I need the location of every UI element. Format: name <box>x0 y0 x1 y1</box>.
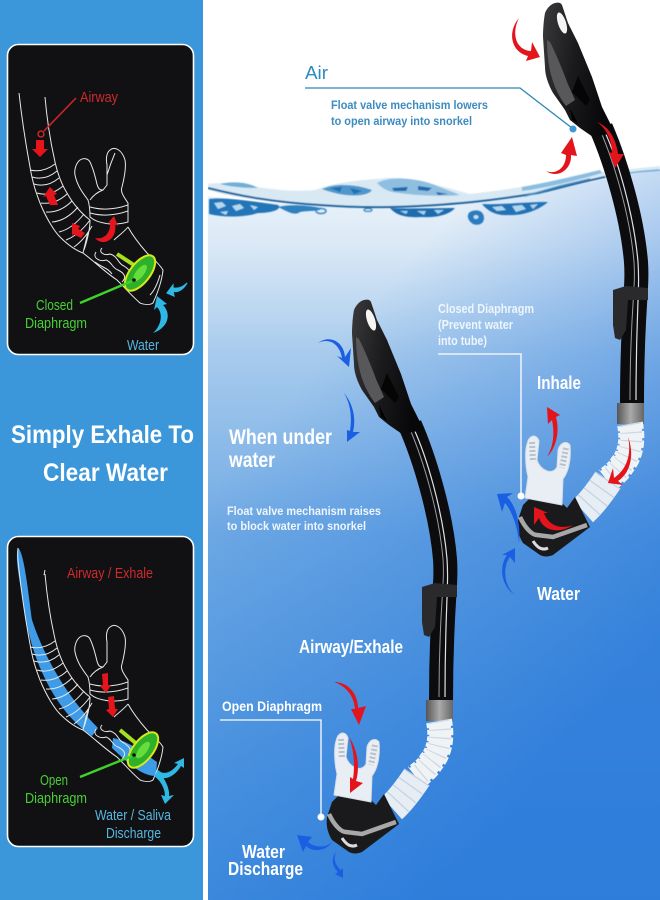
discharge arrows <box>154 758 184 804</box>
callout: open diaphragm <box>220 698 324 820</box>
snorkel: under water <box>327 300 457 854</box>
connector ring <box>617 403 644 424</box>
tube <box>601 128 636 404</box>
callout: closed diaphragm: (Prevent water <box>438 317 513 332</box>
panel: open diaphragm <box>8 536 194 846</box>
black elbow <box>327 794 399 854</box>
heading: when under water: When under <box>229 426 332 449</box>
red airflow arrows <box>100 673 118 717</box>
top valve head <box>543 3 615 137</box>
snorkel: above water <box>518 3 648 557</box>
callout: air: Float valve mechanism lowers <box>331 98 488 112</box>
label: airway exhale: Airway / Exhale <box>67 565 153 582</box>
green pointer <box>80 753 136 777</box>
label: airway exhale: Airway/Exhale <box>299 637 403 657</box>
tube clip <box>422 583 457 637</box>
mouthpiece <box>525 436 570 505</box>
panel background <box>8 536 194 846</box>
callout: air <box>305 63 576 132</box>
heading: when under water: water <box>228 449 275 472</box>
callout: closed diaphragm: Closed Diaphragm <box>438 301 534 316</box>
flexible hose <box>416 721 440 777</box>
panel: closed diaphragm <box>8 44 194 354</box>
callout: open diaphragm: Open Diaphragm <box>222 698 322 714</box>
callout: air: Air <box>305 63 328 83</box>
callout: air: to open airway into snorkel <box>331 114 472 128</box>
snorkel line drawing <box>19 93 163 304</box>
label: open diaphragm: Diaphragm <box>25 790 87 807</box>
mouthpiece <box>334 733 379 802</box>
label: water: Water <box>127 337 159 354</box>
top valve head <box>352 300 424 434</box>
flexible hose <box>607 424 631 480</box>
tube <box>410 425 445 701</box>
label: water discharge: Discharge <box>228 859 303 879</box>
heading: simply exhale: Clear Water <box>43 459 168 487</box>
label: inhale: Inhale <box>537 373 581 393</box>
water stream <box>17 548 157 776</box>
red arrows: exhale <box>334 682 366 793</box>
callout: closed diaphragm <box>438 301 534 500</box>
water body background <box>208 170 660 900</box>
diaphragm <box>117 250 161 296</box>
snorkel line drawing <box>19 570 163 782</box>
white divider strip <box>203 0 208 900</box>
diaphragm <box>120 727 164 773</box>
water surface splash <box>208 166 660 225</box>
label: closed diaphragm: Closed <box>36 297 73 314</box>
blue arrows: top snorkel water <box>497 493 519 595</box>
label: airway: Airway <box>80 89 118 106</box>
label: open diaphragm: Open <box>40 772 68 789</box>
blue arrows: discharge <box>297 835 343 878</box>
red arrows: top snorkel <box>512 18 631 530</box>
black elbow <box>518 497 590 556</box>
panel background <box>8 44 194 354</box>
label: water top snorkel: Water <box>537 584 580 604</box>
text: float valve raises: Float valve mechanism raises <box>227 504 381 518</box>
label: water saliva discharge: Discharge <box>106 825 161 842</box>
airway pointer <box>38 98 76 137</box>
label: water saliva discharge: Water / Saliva <box>95 807 172 824</box>
tube clip <box>613 286 648 340</box>
left blue column <box>0 0 203 900</box>
green pointer <box>80 278 136 303</box>
callout: closed diaphragm: into tube) <box>438 333 487 348</box>
blue arrows: head of lower snorkel <box>318 339 360 442</box>
connector ring <box>426 700 453 721</box>
water arrows <box>153 283 187 333</box>
label: closed diaphragm: Diaphragm <box>25 315 87 332</box>
heading: simply exhale: Simply Exhale To <box>11 421 194 449</box>
red airflow arrows <box>32 140 118 242</box>
text: float valve raises: to block water into snorkel <box>227 519 366 533</box>
label: water discharge: Water <box>242 842 285 862</box>
